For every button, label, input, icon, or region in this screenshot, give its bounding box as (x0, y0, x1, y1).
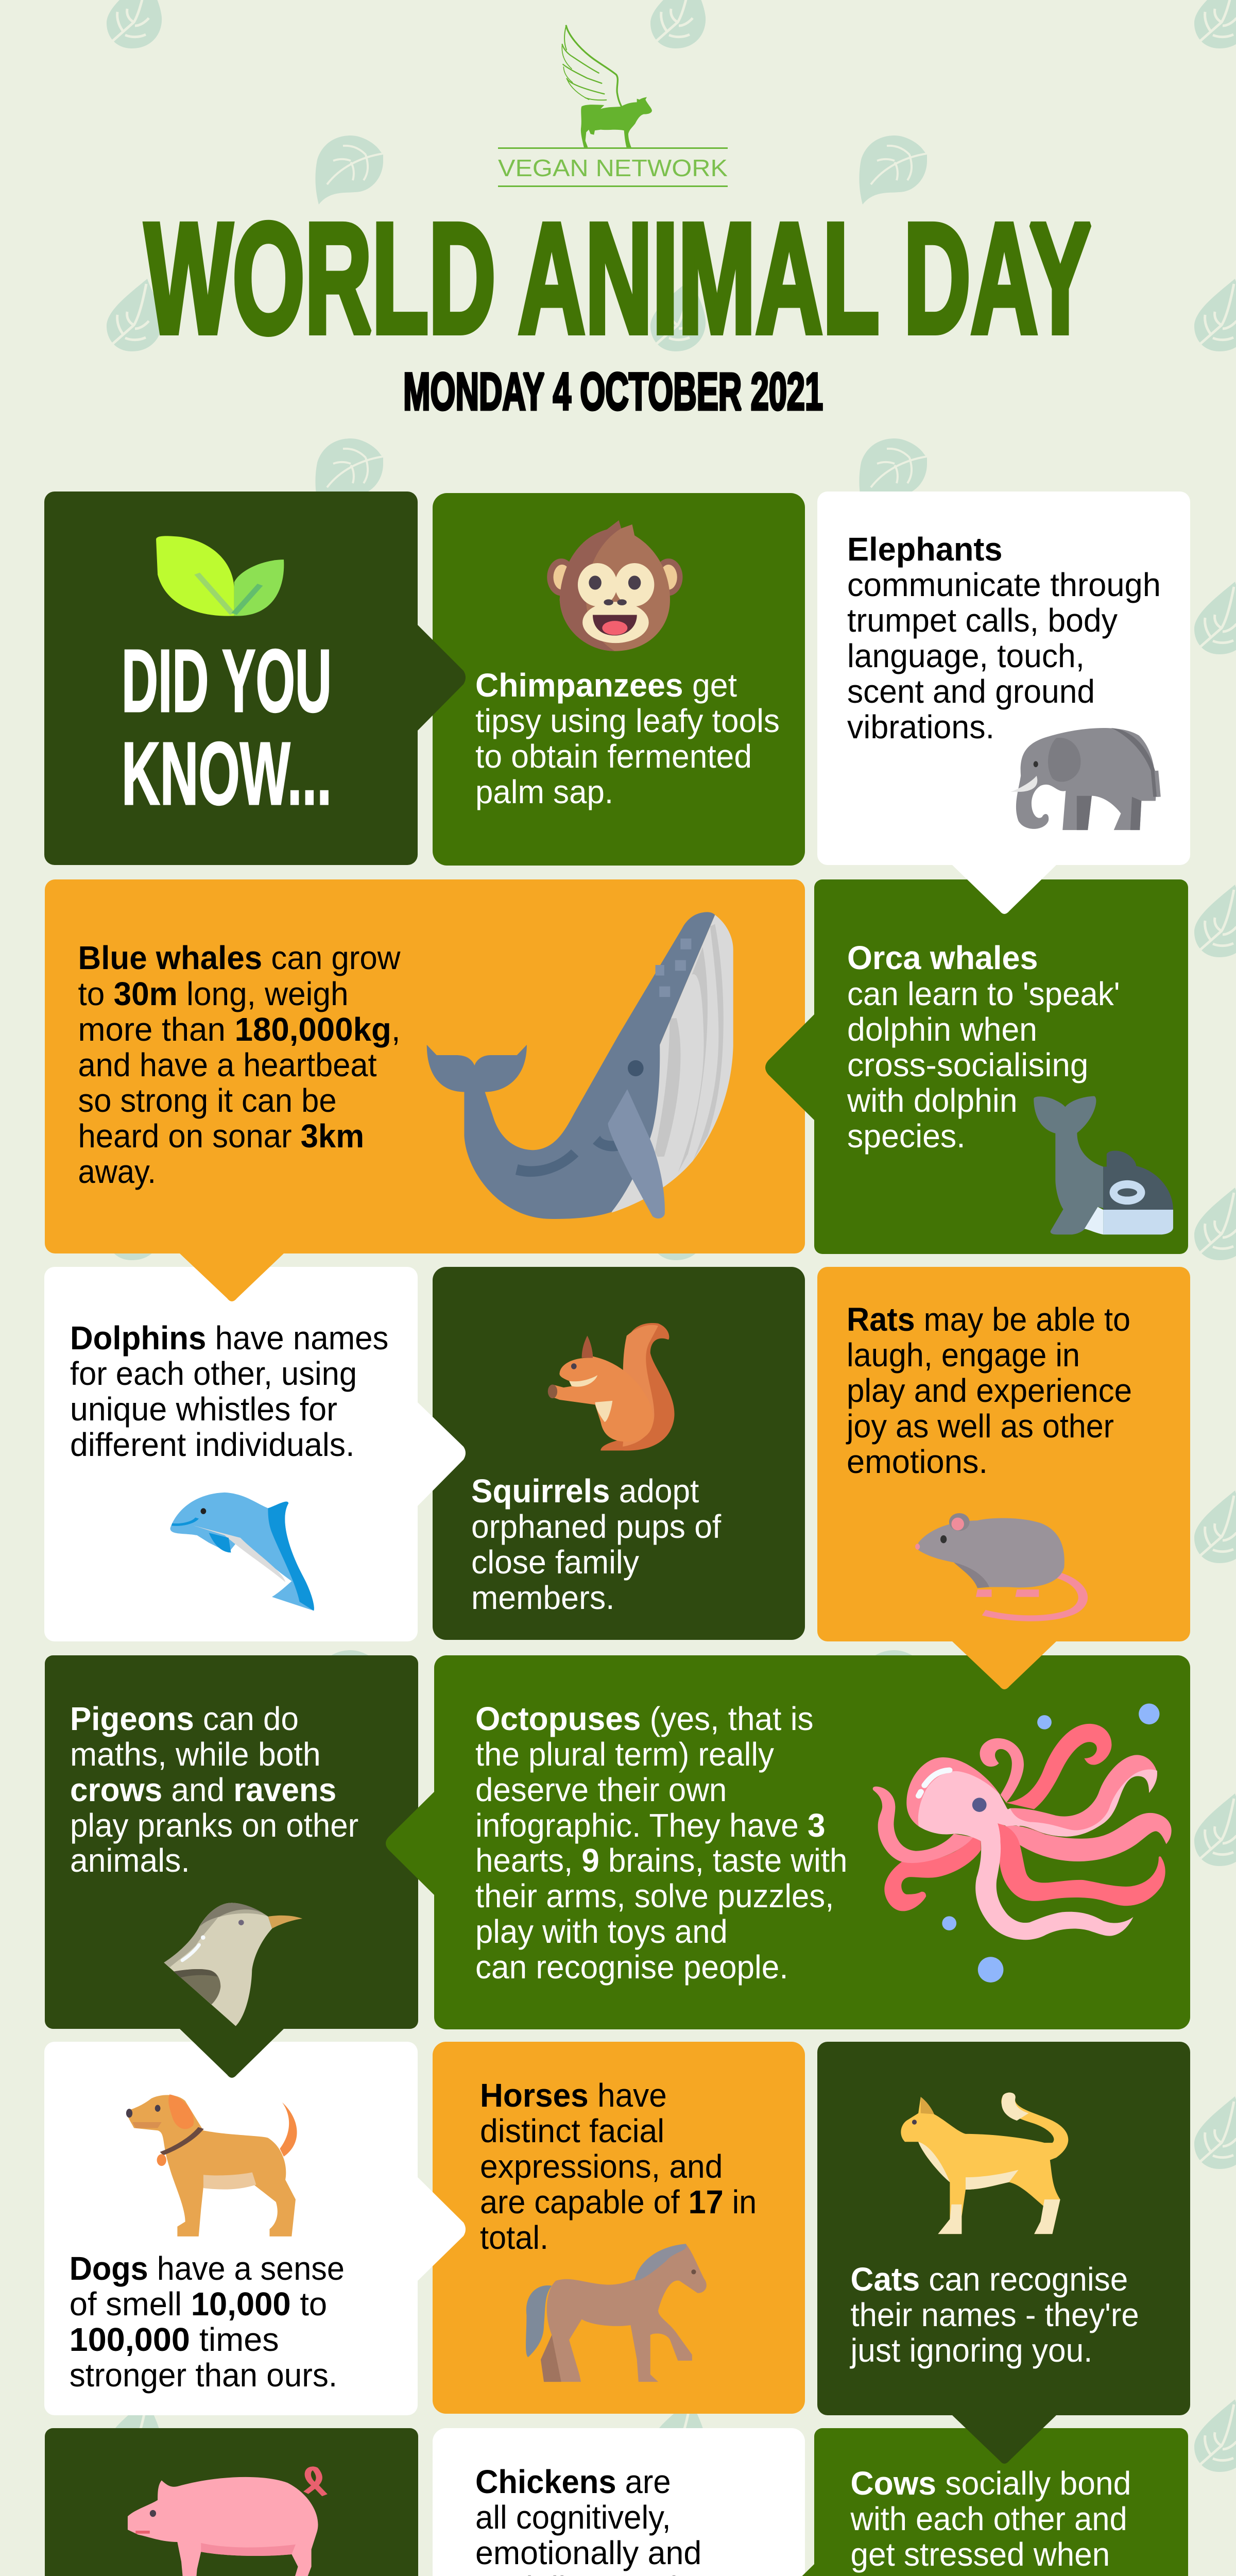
arrow: did you know to chimpanzees (418, 625, 466, 731)
text: dolphins: Dolphins have names (70, 1319, 388, 1357)
logo wordmark: VEGAN NETWORK (498, 155, 728, 181)
text: dogs: 100,000 times (70, 2321, 279, 2358)
text: elephants: vibrations. (847, 708, 994, 745)
text: blue whales: Blue whales can grow (78, 939, 401, 976)
text: orca whales: species. (847, 1117, 966, 1155)
text: rats: laugh, engage in (847, 1336, 1080, 1374)
arrow: blue whale to dolphins (180, 1253, 284, 1301)
arrow: cows to chickens (765, 2564, 814, 2576)
text: orca whales: can learn to 'speak' (847, 975, 1120, 1012)
icon: blue whale (427, 912, 733, 1219)
text: orca whales: cross-socialising (847, 1046, 1088, 1083)
text: rats: play and experience (847, 1372, 1132, 1409)
arrow: orca left (765, 1014, 814, 1120)
text: pigeons: crows and ravens (70, 1771, 336, 1808)
text: octopuses: Octopuses (yes, that is (475, 1700, 814, 1737)
text: octopuses (475, 1700, 847, 1986)
text: elephants: trumpet calls, body (847, 602, 1118, 639)
text: squirrels: orphaned pups of (471, 1508, 721, 1545)
text: squirrels: close family (471, 1544, 639, 1581)
icon: squirrel (548, 1323, 675, 1451)
icon: winged cow (562, 26, 652, 148)
icon: pig (128, 2468, 325, 2576)
text: rats: emotions. (847, 1443, 988, 1480)
text: octopuses: deserve their own (475, 1771, 727, 1808)
text: horses: Horses have (480, 2077, 667, 2114)
text: blue whales: heard on sonar 3km (78, 1117, 364, 1155)
text: pigeons: play pranks on other (70, 1807, 358, 1844)
panel: octopuses (434, 1655, 1190, 2029)
icon: pigeon (164, 1903, 302, 2026)
text: dolphins: unique whistles for (70, 1391, 337, 1428)
text: octopuses: play with toys and (475, 1913, 728, 1950)
text: dogs (70, 2250, 345, 2394)
text: chimpanzees: tipsy using leafy tools (475, 702, 780, 739)
text: octopuses: the plural term) really (475, 1736, 774, 1773)
logo: Vegan Network winged cow (498, 26, 728, 187)
heading: did you know: DID YOU (122, 631, 332, 731)
text: dogs: stronger than ours. (70, 2357, 337, 2394)
panel: dogs (44, 2042, 418, 2415)
text: chickens: all cognitively, (475, 2499, 671, 2536)
text: pigeons: animals. (70, 1842, 190, 1879)
text: blue whales (78, 939, 401, 1190)
panel: cats (817, 2042, 1190, 2415)
icon: elephant (1010, 728, 1159, 830)
icon: rat (915, 1513, 1083, 1618)
text: rats (846, 1301, 1132, 1480)
text: cows: with each other and (850, 2500, 1127, 2537)
text: octopuses: their arms, solve puzzles, (475, 1877, 834, 1914)
panel: cows (814, 2428, 1188, 2576)
panel: blue whales (45, 879, 805, 1253)
text: pigeons: Pigeons can do (70, 1700, 299, 1737)
text: dogs: of smell 10,000 to (70, 2285, 327, 2323)
panel: pigs (45, 2428, 418, 2576)
text: pigeons: maths, while both (70, 1736, 321, 1773)
arrow: pigeons to dogs (180, 2029, 284, 2078)
text: chickens (475, 2463, 712, 2576)
text: squirrels: members. (471, 1579, 615, 1616)
text: dogs: Dogs have a sense (70, 2250, 345, 2287)
text: horses: total. (480, 2219, 548, 2256)
text: cows (850, 2465, 1131, 2576)
text: elephants: Elephants (847, 531, 1002, 568)
arrow: dolphins to squirrels (418, 1402, 466, 1506)
date subtitle: MONDAY 4 OCTOBER 2021 (403, 362, 823, 421)
icon: cat (901, 2093, 1068, 2234)
text: cats: Cats can recognise (851, 2261, 1128, 2298)
text: octopuses: infographic. They have 3 (475, 1807, 826, 1844)
text: cats: their names - they're (851, 2296, 1139, 2333)
arrow: rats to octopuses (952, 1641, 1056, 1689)
text: blue whales: more than 180,000kg, (78, 1011, 401, 1048)
text: orca whales: with dolphin (847, 1082, 1018, 1119)
text: horses (480, 2077, 757, 2256)
icon: green leaves (156, 536, 284, 616)
panel: rats (817, 1267, 1190, 1641)
text: chimpanzees: palm sap. (475, 773, 613, 810)
panel: elephants (817, 492, 1190, 865)
text: blue whales: to 30m long, weigh (78, 975, 348, 1012)
text: horses: expressions, and (480, 2148, 723, 2185)
text: cows: Cows socially bond (851, 2465, 1131, 2502)
icon: horse (526, 2244, 707, 2382)
text: squirrels (471, 1472, 721, 1616)
text: blue whales: so strong it can be (78, 1082, 337, 1119)
icon: dolphin (170, 1493, 314, 1611)
text: rats: Rats may be able to (847, 1301, 1130, 1338)
text: blue whales: and have a heartbeat (78, 1046, 377, 1083)
text: orca whales (847, 939, 1120, 1155)
text: chimpanzees: to obtain fermented (475, 738, 752, 775)
panel: chickens (433, 2428, 805, 2576)
icon: monkey (547, 520, 682, 651)
panel: horses (433, 2042, 805, 2414)
text: cats (850, 2261, 1139, 2369)
text: rats: joy as well as other (846, 1408, 1114, 1445)
text: elephants (847, 531, 1161, 745)
panel: squirrels (433, 1267, 805, 1640)
text: dolphins: different individuals. (70, 1426, 354, 1463)
panel: orca whales (814, 879, 1188, 1254)
arrow: octopuses to pigeons (386, 1792, 434, 1895)
panel: chimpanzees (433, 493, 805, 866)
arrow: elephants to orca (952, 865, 1056, 914)
text: chickens: emotionally and (475, 2534, 701, 2571)
text: elephants: language, touch, (847, 637, 1085, 674)
text: chickens: Chickens are (475, 2463, 671, 2500)
text: dolphins (70, 1319, 388, 1463)
panel: pigeons (45, 1655, 418, 2029)
icon: orca (1034, 1096, 1173, 1234)
text: cats: just ignoring you. (850, 2332, 1092, 2369)
text: chimpanzees: Chimpanzees get (475, 667, 737, 704)
arrow: cats to cows (952, 2415, 1056, 2464)
text: orca whales: dolphin when (847, 1011, 1037, 1048)
text: squirrels: Squirrels adopt (471, 1472, 699, 1510)
text: pigeons (70, 1700, 358, 1879)
text: octopuses: can recognise people. (475, 1948, 788, 1986)
panel: did you know (44, 492, 418, 865)
text: blue whales: away. (78, 1153, 156, 1190)
heading: did you know (122, 631, 332, 823)
text: chimpanzees (475, 667, 780, 810)
icon: octopus (873, 1704, 1172, 1982)
icon: dog (126, 2094, 297, 2236)
heading: did you know: KNOW... (122, 723, 332, 823)
panel: dolphins (44, 1267, 418, 1641)
text: octopuses: hearts, 9 brains, taste with (475, 1842, 847, 1879)
text: horses: distinct facial (480, 2112, 664, 2149)
text: dolphins: for each other, using (70, 1355, 357, 1392)
text: orca whales: Orca whales (847, 939, 1038, 976)
text: elephants: scent and ground (847, 673, 1095, 710)
arrow: dogs to horses (418, 2177, 466, 2281)
text: elephants: communicate through (847, 566, 1161, 603)
text: cows: get stressed when (851, 2536, 1110, 2573)
text: horses: are capable of 17 in (480, 2183, 757, 2221)
